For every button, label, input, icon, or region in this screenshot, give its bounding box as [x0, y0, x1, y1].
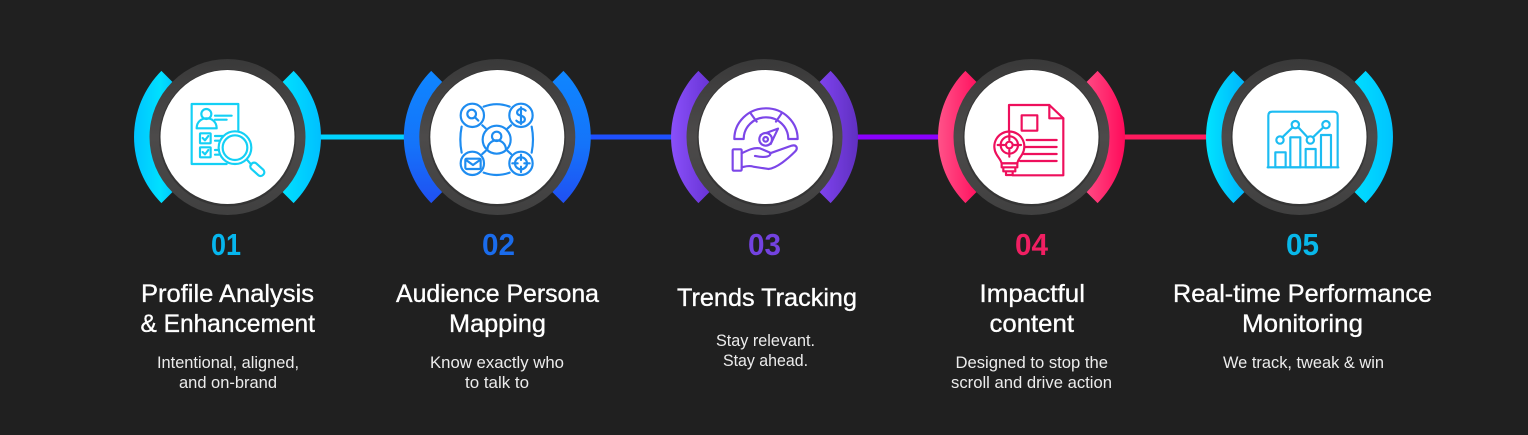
connector: step 2 to 3	[588, 134, 674, 140]
title: Real-time Performance Monitoring: Monitoring	[1242, 310, 1363, 338]
title: Trends Tracking: Trends Tracking	[677, 284, 857, 312]
title: Audience Persona Mapping: Mapping	[449, 310, 546, 338]
icon: performance chart on monitor	[1268, 112, 1338, 167]
step 4 badge	[938, 59, 1125, 215]
step 1 text	[140, 227, 315, 392]
step 5 text	[1173, 227, 1432, 372]
step 5 badge	[1206, 59, 1393, 215]
icon: audience persona map	[460, 104, 533, 175]
step 4 text	[951, 227, 1112, 392]
connector: step 3 to 4	[855, 134, 941, 140]
description: Intentional, aligned,	[157, 353, 299, 372]
title: Impactful content: Impactful	[980, 280, 1085, 308]
step 3 text	[677, 227, 857, 370]
step 2 text	[396, 227, 599, 392]
title: Profile Analysis & Enhancement	[140, 280, 315, 338]
description: We track, tweak & win	[1223, 353, 1384, 372]
number 01: 01	[211, 227, 241, 262]
title: Real-time Performance Monitoring: Real-time Performance	[1173, 280, 1432, 308]
icon: profile with magnifier	[192, 104, 266, 177]
step 3 badge	[671, 59, 858, 215]
step 2 badge	[404, 59, 591, 215]
title: Impactful content	[980, 280, 1085, 338]
step 1 badge	[134, 59, 321, 215]
title: Profile Analysis & Enhancement: Profile Analysis	[141, 280, 314, 308]
description: Know exactly who	[430, 353, 564, 372]
description	[716, 331, 815, 370]
description: and on-brand	[179, 373, 277, 392]
description: Stay relevant.	[716, 331, 815, 350]
number 04: 04	[1015, 227, 1049, 262]
description	[430, 353, 564, 392]
connector: step 1 to 2	[318, 134, 408, 140]
title: Audience Persona Mapping	[396, 280, 599, 338]
description: to talk to	[465, 373, 529, 392]
description: Designed to stop the	[956, 353, 1108, 372]
title: Real-time Performance Monitoring	[1173, 280, 1432, 338]
number 02: 02	[482, 227, 515, 262]
description: Stay ahead.	[723, 351, 808, 370]
title: Profile Analysis & Enhancement: & Enhancement	[140, 310, 315, 338]
description	[951, 353, 1112, 392]
number 05: 05	[1286, 227, 1319, 262]
number 03: 03	[748, 227, 781, 262]
description	[157, 353, 299, 392]
icon: document with target bulb	[994, 105, 1063, 175]
icon: gauge over hand	[733, 108, 798, 171]
connector: step 4 to 5	[1122, 134, 1209, 140]
description: scroll and drive action	[951, 373, 1112, 392]
title: Impactful content: content	[990, 310, 1074, 338]
title: Audience Persona Mapping: Audience Persona	[396, 280, 599, 308]
